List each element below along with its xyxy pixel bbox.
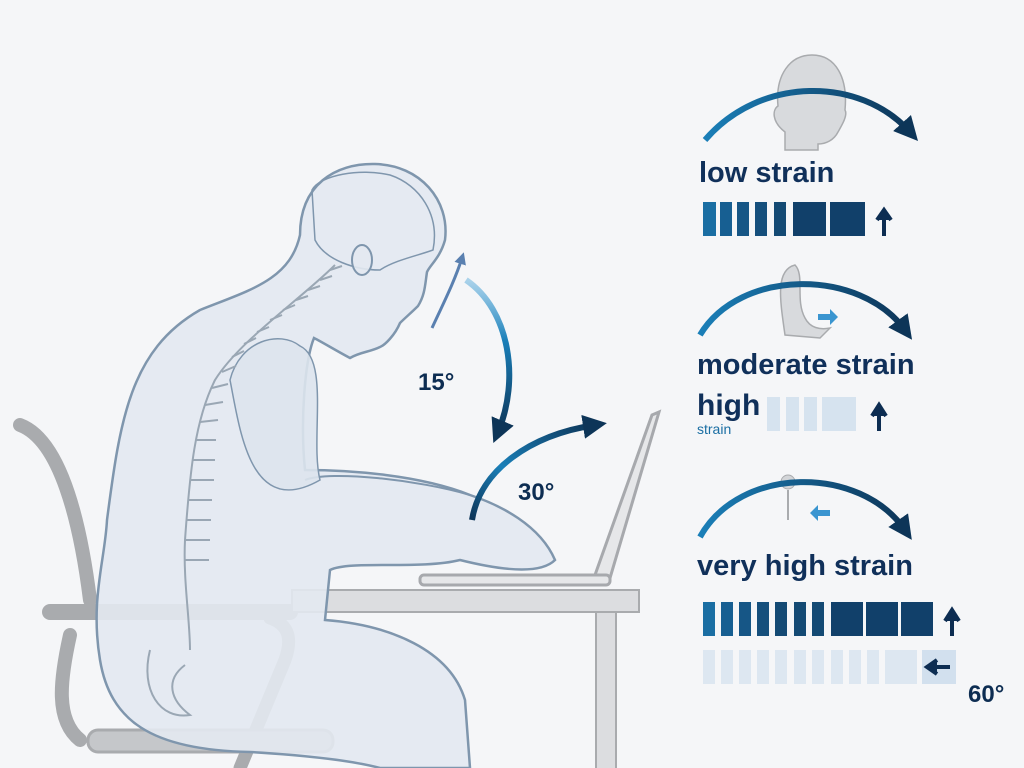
panel: low strain: low strain	[699, 157, 834, 189]
panel: moderate strain: strain	[697, 421, 731, 437]
panel: very high strain	[697, 475, 1004, 708]
angle arrow 15: 15°	[418, 369, 454, 396]
panel: low strain	[699, 55, 910, 236]
chair	[20, 425, 333, 768]
panel: moderate strain: moderate strain	[697, 349, 915, 381]
icon: head top	[781, 475, 795, 520]
angle arrow 30	[472, 425, 595, 520]
icon: head side	[781, 265, 830, 338]
spine	[147, 265, 342, 716]
panel: moderate strain: high	[697, 389, 760, 422]
panel: very high strain: 60°	[968, 681, 1004, 708]
panel: very high strain: very high strain	[697, 550, 913, 582]
angle arrow 15	[418, 258, 509, 432]
angle arrow 30: 30°	[518, 479, 554, 506]
desk	[292, 590, 639, 768]
person body	[97, 164, 555, 768]
laptop	[420, 412, 659, 585]
icon: head front	[774, 55, 846, 150]
panel: moderate strain	[697, 265, 915, 437]
